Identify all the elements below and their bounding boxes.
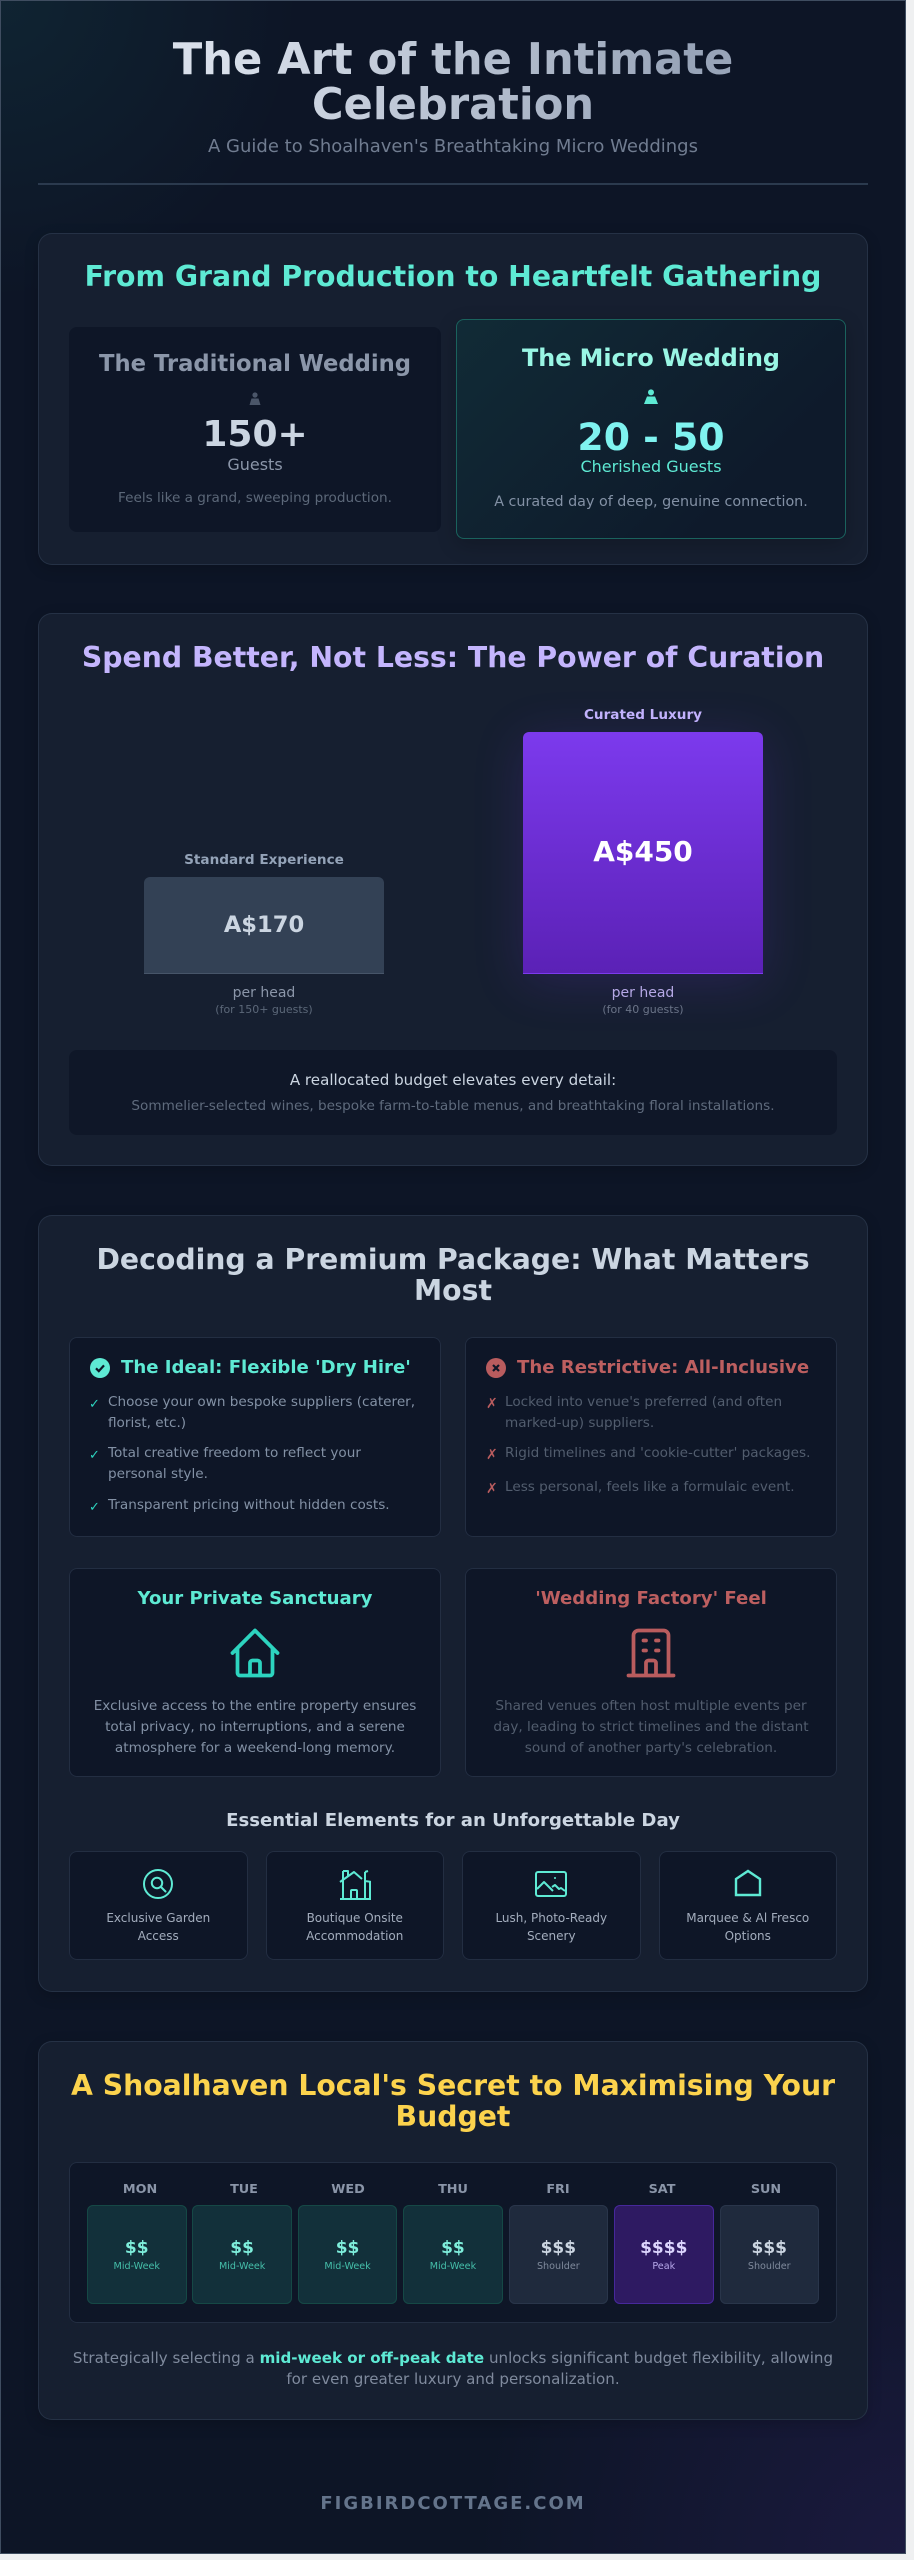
card: all-inclusive <box>465 1337 837 1537</box>
cell: monday: Mid-Week <box>114 2261 160 2272</box>
icon: office building <box>626 1628 676 1678</box>
cell: wednesday: Mid-Week <box>324 2261 371 2272</box>
list item: marked-up) suppliers. <box>505 1415 654 1431</box>
factory description <box>493 1698 809 1756</box>
luxury bar A$450: A$450 <box>593 835 693 868</box>
accommodation label: Accommodation <box>306 1929 403 1943</box>
cell: tuesday: Mid-Week <box>219 2261 265 2272</box>
cell: wednesday <box>298 2205 397 2304</box>
title: Celebration <box>312 80 594 130</box>
heading: from grand production: From Grand Production to Heartfelt Gathering <box>85 260 821 293</box>
list item: personal style. <box>108 1466 208 1482</box>
card: private sanctuary <box>69 1568 441 1777</box>
standard bar A$170 <box>144 877 384 974</box>
header <box>38 34 868 185</box>
garden label: Exclusive Garden <box>106 1911 210 1925</box>
card: marquee <box>658 1851 837 1960</box>
factory description: sound of another party's celebration. <box>525 1740 777 1756</box>
icon: guest <box>644 389 658 404</box>
day label: SUN <box>751 2182 781 2197</box>
card: scenery <box>462 1851 640 1960</box>
cell: wednesday: $$ <box>336 2238 359 2258</box>
card: all-inclusive: ✗ <box>486 1447 498 1463</box>
title: The Art of the Intimate <box>173 34 733 84</box>
standard label: Standard Experience <box>184 852 344 868</box>
luxury bar A$450 <box>523 732 763 974</box>
cell: friday: $$$ <box>541 2238 576 2258</box>
cell: sunday <box>720 2205 819 2304</box>
standard bar A$170: A$170 <box>224 912 304 938</box>
cell: thursday: Mid-Week <box>430 2261 476 2272</box>
heading: spend better: Spend Better, Not Less: The Power of Curation <box>82 641 824 674</box>
factory title: 'Wedding Factory' Feel <box>535 1588 767 1609</box>
micro description: A curated day of deep, genuine connection. <box>494 494 808 510</box>
garden label <box>106 1911 210 1943</box>
accommodation label <box>306 1911 403 1943</box>
icon: boutique house <box>340 1870 371 1900</box>
card: dry hire <box>69 1337 441 1537</box>
day label: SAT <box>649 2182 675 2197</box>
weekly price calendar <box>69 2162 837 2323</box>
budget tip paragraph <box>73 2348 833 2388</box>
card: wedding factory <box>465 1568 837 1777</box>
luxury label: Curated Luxury <box>584 707 702 723</box>
guest note: (for 40 guests) <box>602 1003 684 1016</box>
cell: saturday <box>614 2205 714 2304</box>
list item: Rigid timelines and 'cookie-cutter' packages. <box>505 1445 810 1461</box>
scenery label: Lush, Photo-Ready <box>495 1911 607 1925</box>
bar: standard experience <box>144 852 384 1016</box>
callout detail: Sommelier-selected wines, bespoke farm-to-table menus, and breathtaking floral installations. <box>131 1098 775 1114</box>
list item <box>89 1394 415 1431</box>
panel: decoding a premium package <box>38 1215 868 1992</box>
cell: sunday: $$$ <box>752 2238 787 2258</box>
heading: local's secret <box>71 2069 835 2133</box>
bar: curated luxury <box>508 707 778 1016</box>
icon: check circle <box>90 1358 110 1378</box>
day label: MON <box>123 2182 157 2197</box>
card: dry hire: ✓ <box>89 1448 100 1463</box>
sanctuary description: total privacy, no interruptions, and a serene <box>105 1719 405 1735</box>
traditional description: Feels like a grand, sweeping production. <box>118 490 392 506</box>
marquee label: Marquee & Al Fresco <box>686 1911 809 1925</box>
scenery label: Scenery <box>527 1929 576 1943</box>
marquee label <box>686 1911 809 1943</box>
all-inclusive heading: The Restrictive: All-Inclusive <box>517 1357 809 1378</box>
list item <box>486 1394 782 1431</box>
card: traditional wedding <box>69 327 441 532</box>
day label: TUE <box>230 2182 258 2197</box>
micro title: The Micro Wedding <box>522 344 780 372</box>
cell: friday: Shoulder <box>537 2261 580 2272</box>
icon: search circle <box>143 1869 173 1899</box>
cell: thursday <box>403 2205 503 2304</box>
card: dry hire: ✓ <box>89 1500 100 1515</box>
cell: monday: $$ <box>125 2238 149 2258</box>
icon: house <box>230 1628 280 1678</box>
per head: per head <box>612 985 674 1001</box>
card: dry hire: ✓ <box>89 1397 100 1412</box>
sanctuary description: atmosphere for a weekend-long memory. <box>115 1740 395 1756</box>
heading: decoding: Most <box>414 1274 492 1307</box>
heading: decoding: Decoding a Premium Package: What Matters <box>96 1243 810 1276</box>
cell: sunday: Shoulder <box>748 2261 791 2272</box>
list item: Locked into venue's preferred (and often <box>505 1394 782 1410</box>
guest note: (for 150+ guests) <box>215 1003 313 1016</box>
panel: local's secret budget <box>38 2041 868 2420</box>
list item <box>89 1445 361 1482</box>
cell: monday <box>87 2205 186 2304</box>
callout: reallocated budget <box>69 1050 837 1135</box>
list item: Total creative freedom to reflect your <box>108 1445 361 1461</box>
card: all-inclusive: ✗ <box>486 1481 498 1497</box>
sanctuary description <box>94 1698 416 1756</box>
cell: saturday: $$$$ <box>640 2238 687 2258</box>
heading: local's secret: Budget <box>396 2100 510 2133</box>
per head: per head <box>233 985 295 1001</box>
list item: florist, etc.) <box>108 1415 186 1431</box>
cell: thursday: $$ <box>441 2238 465 2258</box>
accommodation label: Boutique Onsite <box>307 1911 403 1925</box>
list item: Choose your own bespoke suppliers (caterer, <box>108 1394 415 1410</box>
sanctuary title: Your Private Sanctuary <box>138 1588 372 1609</box>
heading: local's secret: A Shoalhaven Local's Secret to Maximising Your <box>71 2069 835 2102</box>
title <box>0 38 906 128</box>
scenery label <box>495 1911 607 1943</box>
traditional title: The Traditional Wedding <box>99 351 411 377</box>
factory description: Shared venues often host multiple events per <box>495 1698 807 1714</box>
list item: Transparent pricing without hidden costs. <box>108 1497 390 1513</box>
card: micro wedding <box>456 319 846 539</box>
guest count 20-50: 20 - 50 <box>577 415 725 459</box>
sanctuary description: Exclusive access to the entire property ensures <box>94 1698 416 1714</box>
heading: decoding <box>96 1243 810 1307</box>
icon: marquee tent <box>734 1870 762 1896</box>
cell: tuesday <box>192 2205 292 2304</box>
callout lead: A reallocated budget elevates every detail: <box>290 1071 616 1089</box>
day label: WED <box>331 2182 365 2197</box>
icon: guest <box>250 392 260 405</box>
cell: tuesday: $$ <box>230 2238 254 2258</box>
heading: essential elements: Essential Elements for an Unforgettable Day <box>226 1810 680 1830</box>
guest count 150+: 150+ <box>202 414 308 454</box>
footer: site name: FIGBIRDCOTTAGE.COM <box>320 2493 586 2514</box>
icon: x circle <box>486 1358 506 1378</box>
garden label: Access <box>138 1929 179 1943</box>
day label: THU <box>438 2182 468 2197</box>
factory description: day, leading to strict timelines and the distant <box>493 1719 809 1735</box>
icon: photo <box>535 1871 567 1897</box>
panel: spend better <box>38 613 868 1166</box>
card: garden access <box>69 1851 248 1960</box>
cell: friday <box>509 2205 608 2304</box>
card: accommodation <box>266 1851 444 1960</box>
guests label: Guests <box>227 454 283 474</box>
subtitle: A Guide to Shoalhaven's Breathtaking Micro Weddings <box>208 136 698 157</box>
marquee label: Options <box>725 1929 771 1943</box>
panel: grand production vs heartfelt gathering <box>38 233 868 565</box>
budget tip paragraph: for even greater luxury and personalization. <box>286 2370 620 2388</box>
card: all-inclusive: ✗ <box>486 1396 498 1412</box>
cherished guests label: Cherished Guests <box>580 457 722 476</box>
list item: Less personal, feels like a formulaic event. <box>505 1479 795 1495</box>
cell: saturday: Peak <box>652 2261 675 2272</box>
header divider <box>38 183 868 185</box>
day label: FRI <box>546 2182 570 2197</box>
dry hire heading: The Ideal: Flexible 'Dry Hire' <box>121 1357 411 1378</box>
budget tip paragraph: Strategically selecting a mid-week or off-peak date unlocks significant budget flexibility, allowing <box>73 2348 833 2366</box>
